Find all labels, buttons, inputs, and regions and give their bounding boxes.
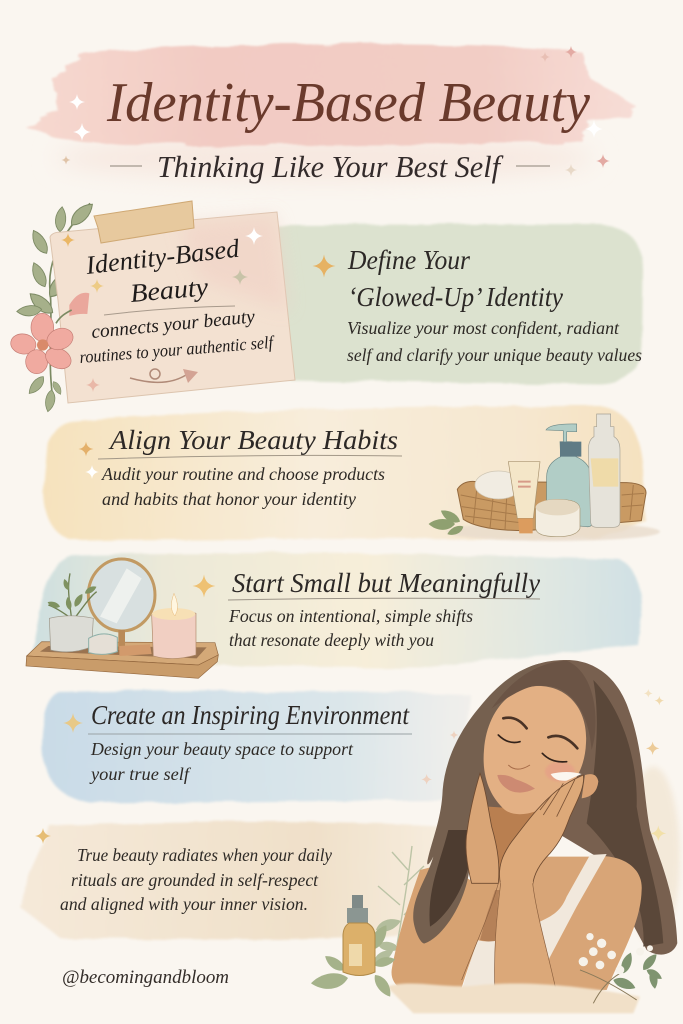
warm wash behind — [627, 767, 680, 947]
body line 2: that resonate deeply with you — [229, 630, 434, 650]
arrow — [130, 369, 198, 383]
bottle label — [349, 944, 362, 966]
heading: Start Small but Meaningfully — [232, 568, 540, 598]
illustration: plant sprig — [372, 846, 424, 966]
forearm edge lines — [462, 883, 557, 993]
floral sprig beside note — [16, 200, 96, 412]
hair back — [470, 660, 677, 955]
panel: align your beauty habits — [44, 406, 645, 540]
icon: pink flower — [9, 293, 89, 374]
quote line 3: and aligned with your inner vision. — [60, 894, 308, 914]
title: Identity-Based Beauty — [106, 72, 590, 134]
tank top — [460, 854, 607, 997]
bottle body — [343, 923, 375, 976]
blush — [545, 762, 575, 782]
note sparkles — [61, 227, 263, 392]
sparkles — [421, 689, 666, 841]
ear — [582, 774, 598, 798]
panel background: blue to cream — [30, 553, 642, 668]
pump bottle — [546, 424, 592, 527]
eyebrows — [503, 718, 577, 748]
lips — [497, 775, 535, 793]
neck — [488, 807, 547, 877]
illustration: woman applying cream — [387, 660, 680, 1013]
subtitle with flanking lines: Thinking Like Your Best Self — [157, 149, 504, 184]
right forearm — [495, 880, 557, 997]
tube — [508, 462, 540, 518]
icon: gold sparkle — [63, 713, 83, 733]
title sparkles — [62, 46, 610, 176]
cotton pad — [475, 471, 522, 499]
left hair shadow — [429, 830, 469, 927]
icon: gold sparkle — [35, 828, 51, 844]
bottom cloud wash — [387, 983, 640, 1013]
left hair mass — [413, 663, 540, 943]
heading: Create an Inspiring Environment — [91, 700, 410, 730]
ground wash — [447, 522, 660, 541]
quote line 2: rituals are grounded in self-respect — [71, 870, 319, 890]
panel background: beige — [18, 822, 440, 940]
leaves at base — [310, 922, 396, 999]
heading: Define Your — [347, 245, 470, 275]
heading: Align Your Beauty Habits — [108, 425, 398, 455]
panel: closing quote — [18, 822, 440, 940]
body line 1: Design your beauty space to support — [90, 739, 354, 759]
illustration: vanity tray — [26, 559, 218, 678]
panel background: blue — [42, 691, 470, 803]
dropper collar — [347, 908, 368, 923]
jar — [536, 499, 580, 537]
heading rule — [88, 733, 412, 735]
pot — [49, 616, 93, 652]
panel: start small — [30, 553, 642, 668]
quote line 1: True beauty radiates when your daily — [77, 845, 332, 865]
note card — [50, 201, 295, 403]
heading rule — [98, 455, 402, 459]
body line 2: and habits that honor your identity — [102, 489, 356, 509]
left arm — [392, 863, 497, 993]
plant — [48, 573, 97, 620]
panel: define your identity — [268, 224, 643, 385]
heading rule — [228, 598, 540, 600]
small jar — [89, 634, 117, 654]
body line 2: your true self — [89, 764, 192, 784]
title banner: watercolor brush stroke — [26, 44, 636, 180]
divider — [104, 306, 235, 315]
paper blush wash — [180, 216, 288, 310]
cream — [551, 772, 582, 781]
panel background: peach — [44, 406, 645, 540]
hair right shadow — [587, 680, 663, 947]
sprig leaves — [429, 507, 465, 538]
note heading: Identity-Based — [83, 234, 242, 280]
candle — [152, 610, 196, 659]
illustration: amber serum bottle — [310, 895, 396, 999]
note heading line 2: Beauty — [129, 272, 210, 308]
spray bottle — [588, 414, 620, 527]
face — [484, 686, 586, 814]
hair crown — [492, 661, 596, 750]
illustration: skincare basket — [429, 414, 660, 541]
bottom flowers and leaves — [579, 933, 664, 1003]
white sparkle — [85, 465, 99, 479]
handle: @becomingandbloom — [62, 967, 229, 988]
paper sheet — [50, 212, 295, 403]
flame — [171, 593, 178, 616]
body line 1: Visualize your most confident, radiant — [347, 318, 620, 338]
washi tape — [94, 201, 194, 243]
body line 1: Focus on intentional, simple shifts — [228, 606, 473, 626]
panel: create environment — [42, 691, 470, 803]
hand right — [499, 775, 584, 885]
hand left — [466, 773, 499, 883]
closed eyes — [498, 735, 567, 762]
finger lines — [540, 779, 575, 817]
body line 1: Audit your routine and choose products — [101, 464, 385, 484]
icon: gold sparkle — [78, 442, 94, 456]
note body line 1: connects your beauty — [90, 306, 256, 343]
icon: gold sparkle — [312, 254, 336, 278]
body line 2: self and clarify your unique beauty values — [347, 345, 642, 365]
heading line 2: ‘Glowed-Up’ Identity — [348, 282, 563, 312]
dropper top — [352, 895, 363, 908]
chest shadow between forearms — [480, 890, 500, 943]
panel background: green — [268, 224, 643, 385]
basket — [457, 481, 646, 531]
mirror — [88, 559, 155, 631]
icon: gold sparkle — [192, 574, 216, 598]
note body line 2: routines to your authentic self — [79, 332, 276, 367]
torso — [470, 856, 642, 997]
wooden tray — [26, 642, 218, 678]
nose — [508, 765, 530, 769]
